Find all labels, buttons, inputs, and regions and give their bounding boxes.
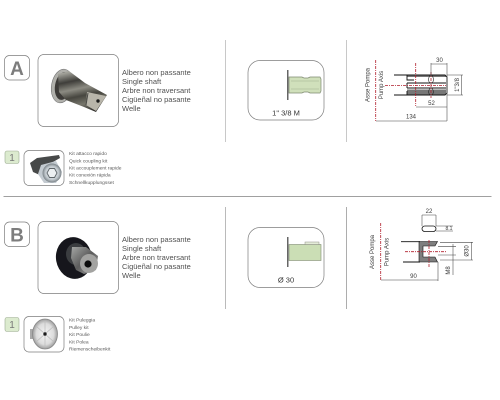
dimensions B: M8	[446, 266, 452, 275]
description text A	[122, 68, 191, 113]
dimensions B: 8.1	[446, 226, 453, 232]
description text A: Cigüeñal no pasante	[122, 95, 191, 104]
dividers A	[225, 40, 347, 142]
kit text A: Quick coupling kit	[69, 158, 108, 164]
kit text B: Riemenscheibenkit	[69, 346, 111, 352]
dimensions B: 22	[426, 209, 433, 215]
kit text B: Kit Polea	[69, 340, 89, 346]
technical drawing B	[370, 209, 473, 281]
axis labels A: Pump Axis	[379, 71, 385, 99]
kit badge 1 B: 1	[9, 320, 15, 331]
kit text A	[69, 151, 122, 186]
kit text B: Pulley kit	[69, 325, 89, 331]
kit text A: Kit accouplement rapide	[69, 166, 122, 172]
horizontal divider	[4, 196, 492, 197]
badge B: B	[10, 226, 24, 246]
dimensions B: Ø30	[464, 245, 470, 257]
technical drawing A	[366, 58, 463, 121]
shaft profile panel B: Ø 30	[278, 276, 294, 284]
photo: keyed shaft B	[38, 222, 118, 294]
dimensions B	[381, 209, 473, 281]
badge B	[4, 222, 30, 246]
description text A: Single shaft	[122, 77, 162, 86]
axis labels B: Pump Axis	[384, 238, 390, 266]
axis labels A: Asse Pompa	[366, 67, 372, 102]
shaft profile panel A: 1" 3/8 M	[272, 108, 300, 118]
description text B: Single shaft	[122, 244, 162, 253]
kit badge 1 B	[5, 318, 19, 332]
axis labels B	[370, 234, 390, 269]
kit text A: Kit conexión rápida	[69, 172, 111, 178]
section A: single shaft with splined end	[4, 54, 463, 186]
photo: pulley kit	[24, 316, 64, 352]
axis labels A	[366, 67, 385, 102]
description text B: Welle	[122, 271, 141, 280]
kit text B	[69, 318, 111, 352]
description text B: Arbre non traversant	[122, 253, 191, 262]
description text B: Albero non passante	[122, 235, 191, 244]
photo: splined shaft A	[38, 54, 118, 126]
badge A	[4, 56, 30, 80]
description text B: Cigüeñal no pasante	[122, 262, 191, 271]
dividers B	[225, 207, 347, 309]
description text B	[122, 235, 191, 280]
kit text B: Kit Poulie	[69, 332, 90, 338]
shaft profile panel B	[248, 228, 324, 288]
dimensions A: 134	[406, 114, 417, 120]
section B: single shaft with keyed end	[4, 209, 473, 352]
shaft profile panel A	[248, 60, 324, 120]
axis labels B: Asse Pompa	[370, 234, 376, 269]
kit text A: Kit attacco rapido	[69, 151, 107, 157]
kit badge 1 A	[5, 151, 19, 164]
description text A: Albero non passante	[122, 68, 191, 77]
key section oval	[422, 226, 436, 232]
kit text B: Kit Puleggia	[69, 318, 95, 324]
dimensions A: 30	[436, 58, 443, 64]
dimensions B: 90	[410, 274, 417, 280]
dimensions A: 52	[428, 101, 435, 107]
photo: quick coupling kit	[24, 150, 64, 186]
dimensions A: 1"3/8	[455, 77, 461, 92]
dimensions A	[376, 58, 463, 121]
kit badge 1 A: 1	[9, 153, 15, 164]
badge A: A	[10, 59, 24, 80]
description text A: Welle	[122, 104, 141, 113]
description text A: Arbre non traversant	[122, 86, 191, 95]
kit text A: Schnellkupplungsset	[69, 180, 115, 186]
